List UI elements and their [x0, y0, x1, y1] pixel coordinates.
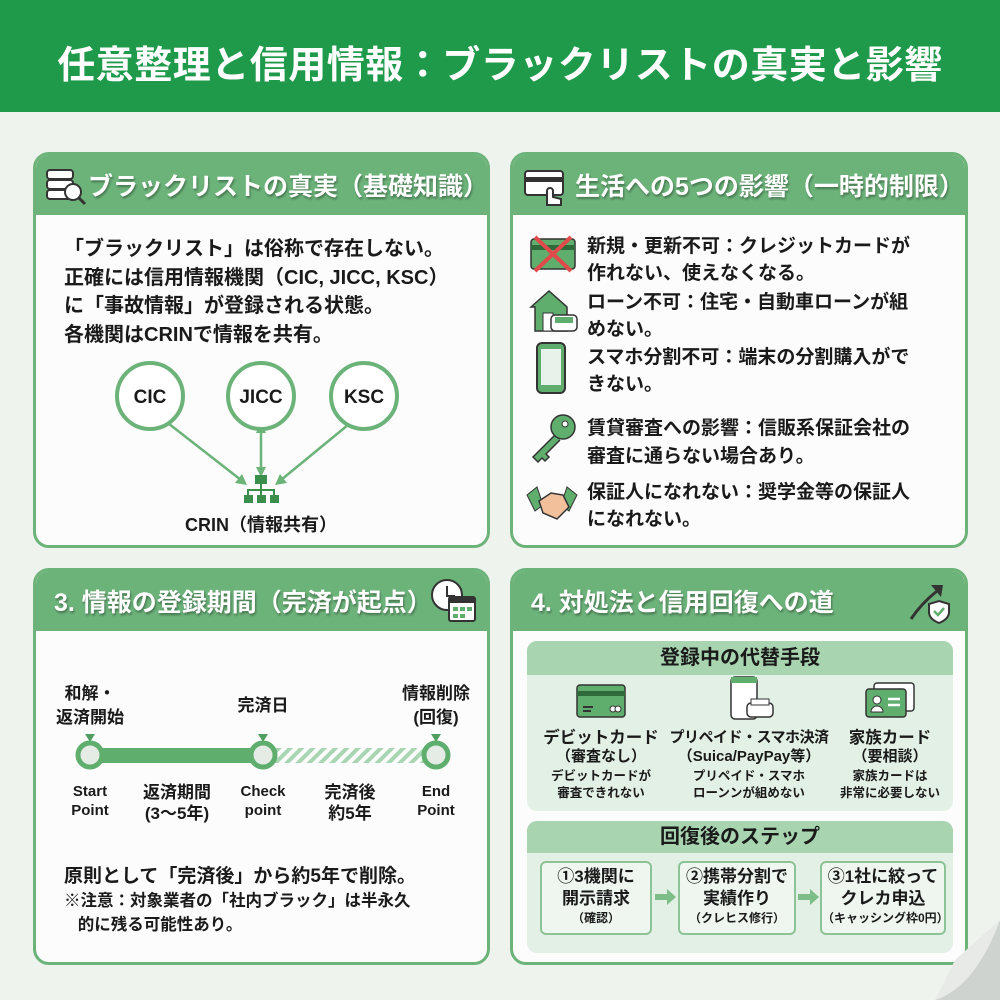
option: debit: 審査できれない [557, 786, 645, 800]
timeline: End [422, 783, 450, 800]
option: family card: （要相談） [852, 748, 928, 765]
step 3: （キャッシング枠0円） [822, 911, 949, 925]
step 1: 開示請求 [562, 889, 630, 908]
item: handshake [526, 482, 910, 530]
panel: registration period [33, 568, 490, 965]
heading [36, 155, 487, 215]
timeline: 返済開始 [56, 708, 124, 727]
icon: database search [46, 169, 86, 205]
option: debit: デビットカード [543, 729, 659, 747]
timeline: 完済後 [324, 782, 376, 802]
option: family card: 家族カード [849, 729, 931, 747]
item: key: 賃貸審査への影響：信販系保証会社の [587, 418, 910, 439]
item: phone: スマホ分割不可：端末の分割購入がで [587, 347, 909, 368]
timeline: Point [417, 802, 455, 819]
sub heading [527, 821, 953, 853]
step 3: ③1社に絞って [828, 867, 938, 886]
caution text: ※注意：対象業者の「社内ブラック」は半永久 [64, 892, 410, 910]
impact list [526, 236, 910, 530]
text block: 正確には信用情報機関（CIC, JICC, KSC） [64, 266, 448, 288]
item: phone: きない。 [587, 374, 663, 395]
timeline: (3〜5年) [145, 803, 209, 823]
option: prepaid: プリペイド・スマホ [693, 769, 805, 783]
heading [513, 571, 965, 631]
timeline: Check [240, 783, 286, 800]
option: family card: 非常に必要しない [840, 786, 940, 800]
timeline: 返済期間 [143, 783, 211, 802]
icon: card hand [524, 170, 564, 206]
timeline: (回復) [413, 707, 459, 727]
heading [513, 155, 965, 215]
step 1: ①3機関に [557, 867, 635, 886]
sub heading: 登録中の代替手段 [660, 647, 820, 669]
option: debit: （審査なし） [556, 748, 646, 765]
step 2 [678, 861, 796, 935]
option: debit [543, 684, 659, 800]
network diagram: CRIN（情報共有） [185, 515, 337, 535]
item: key [532, 414, 910, 467]
arrow [655, 889, 676, 905]
heading [36, 571, 487, 631]
option: prepaid [669, 676, 829, 800]
timeline [56, 684, 470, 823]
option: family card: 家族カードは [852, 769, 928, 783]
item: credit card [530, 236, 910, 284]
item: credit card: 作れない、使えなくなる。 [587, 263, 815, 284]
panel: blacklist truth [33, 152, 490, 548]
sub heading: 回復後のステップ [660, 826, 820, 848]
title: 任意整理と信用情報：ブラックリストの真実と影響 [57, 45, 943, 87]
option: family card [840, 682, 940, 800]
text block: に「事故情報」が登録される状態。 [64, 295, 384, 317]
text block [64, 238, 448, 346]
step 2: 実績作り [703, 889, 771, 908]
option: prepaid: ローンンが組めない [693, 786, 805, 800]
sub-panel: alternatives [527, 641, 953, 811]
timeline: 約5年 [328, 803, 372, 823]
text block: 各機関はCRINで情報を共有。 [64, 324, 333, 346]
caution text: 的に残る可能性あり。 [78, 916, 242, 934]
item: handshake: になれない。 [587, 509, 701, 530]
option: prepaid: （Suica/PayPay等） [678, 748, 820, 765]
text block: 「ブラックリスト」は俗称で存在しない。 [64, 238, 444, 260]
item: credit card: 新規・更新不可：クレジットカードが [587, 236, 910, 257]
network diagram: JICC [239, 387, 283, 408]
header band [0, 0, 1000, 112]
step 3: クレカ申込 [840, 889, 926, 908]
panel: 5 impacts [510, 152, 968, 548]
timeline: point [245, 802, 281, 819]
network diagram [115, 361, 399, 535]
icon: arrow shield [910, 585, 950, 624]
timeline: 完済日 [238, 696, 288, 715]
item: handshake: 保証人になれない：奨学金等の保証人 [587, 482, 910, 503]
arrow [798, 889, 819, 905]
step 2: ②携帯分割で [686, 867, 788, 886]
step 2: （クレヒス修行） [689, 911, 785, 925]
step 1 [540, 861, 652, 935]
option: debit: デビットカードが [551, 769, 651, 783]
timeline: Point [71, 802, 109, 819]
note text: 原則として「完済後」から約5年で削除。 [64, 866, 416, 887]
heading: 3. 情報の登録期間（完済が起点） [54, 589, 432, 617]
step 1: （確認） [572, 911, 620, 925]
step 3 [820, 861, 946, 935]
timeline: Start [73, 783, 107, 800]
item: loan: めない。 [587, 319, 663, 340]
caution text [64, 892, 410, 934]
item: key: 審査に通らない場合あり。 [587, 446, 815, 467]
icon: clock calendar [431, 579, 476, 622]
network diagram: KSC [344, 387, 384, 408]
item: phone [536, 342, 909, 395]
page curl [936, 920, 1000, 1000]
item: loan: ローン不可：住宅・自動車ローンが組 [587, 292, 908, 313]
item: loan [529, 290, 908, 340]
panel: remedies [510, 568, 968, 965]
timeline: 和解・ [64, 684, 116, 703]
heading: 4. 対処法と信用回復への道 [531, 589, 834, 617]
heading: ブラックリストの真実（基礎知識） [88, 173, 488, 201]
heading: 生活への5つの影響（一時的制限） [575, 173, 964, 201]
timeline: 情報削除 [402, 684, 470, 703]
sub-panel: steps [527, 821, 953, 953]
sub heading [527, 641, 953, 675]
network diagram: CIC [134, 387, 167, 408]
option: prepaid: プリペイド・スマホ決済 [669, 729, 829, 746]
